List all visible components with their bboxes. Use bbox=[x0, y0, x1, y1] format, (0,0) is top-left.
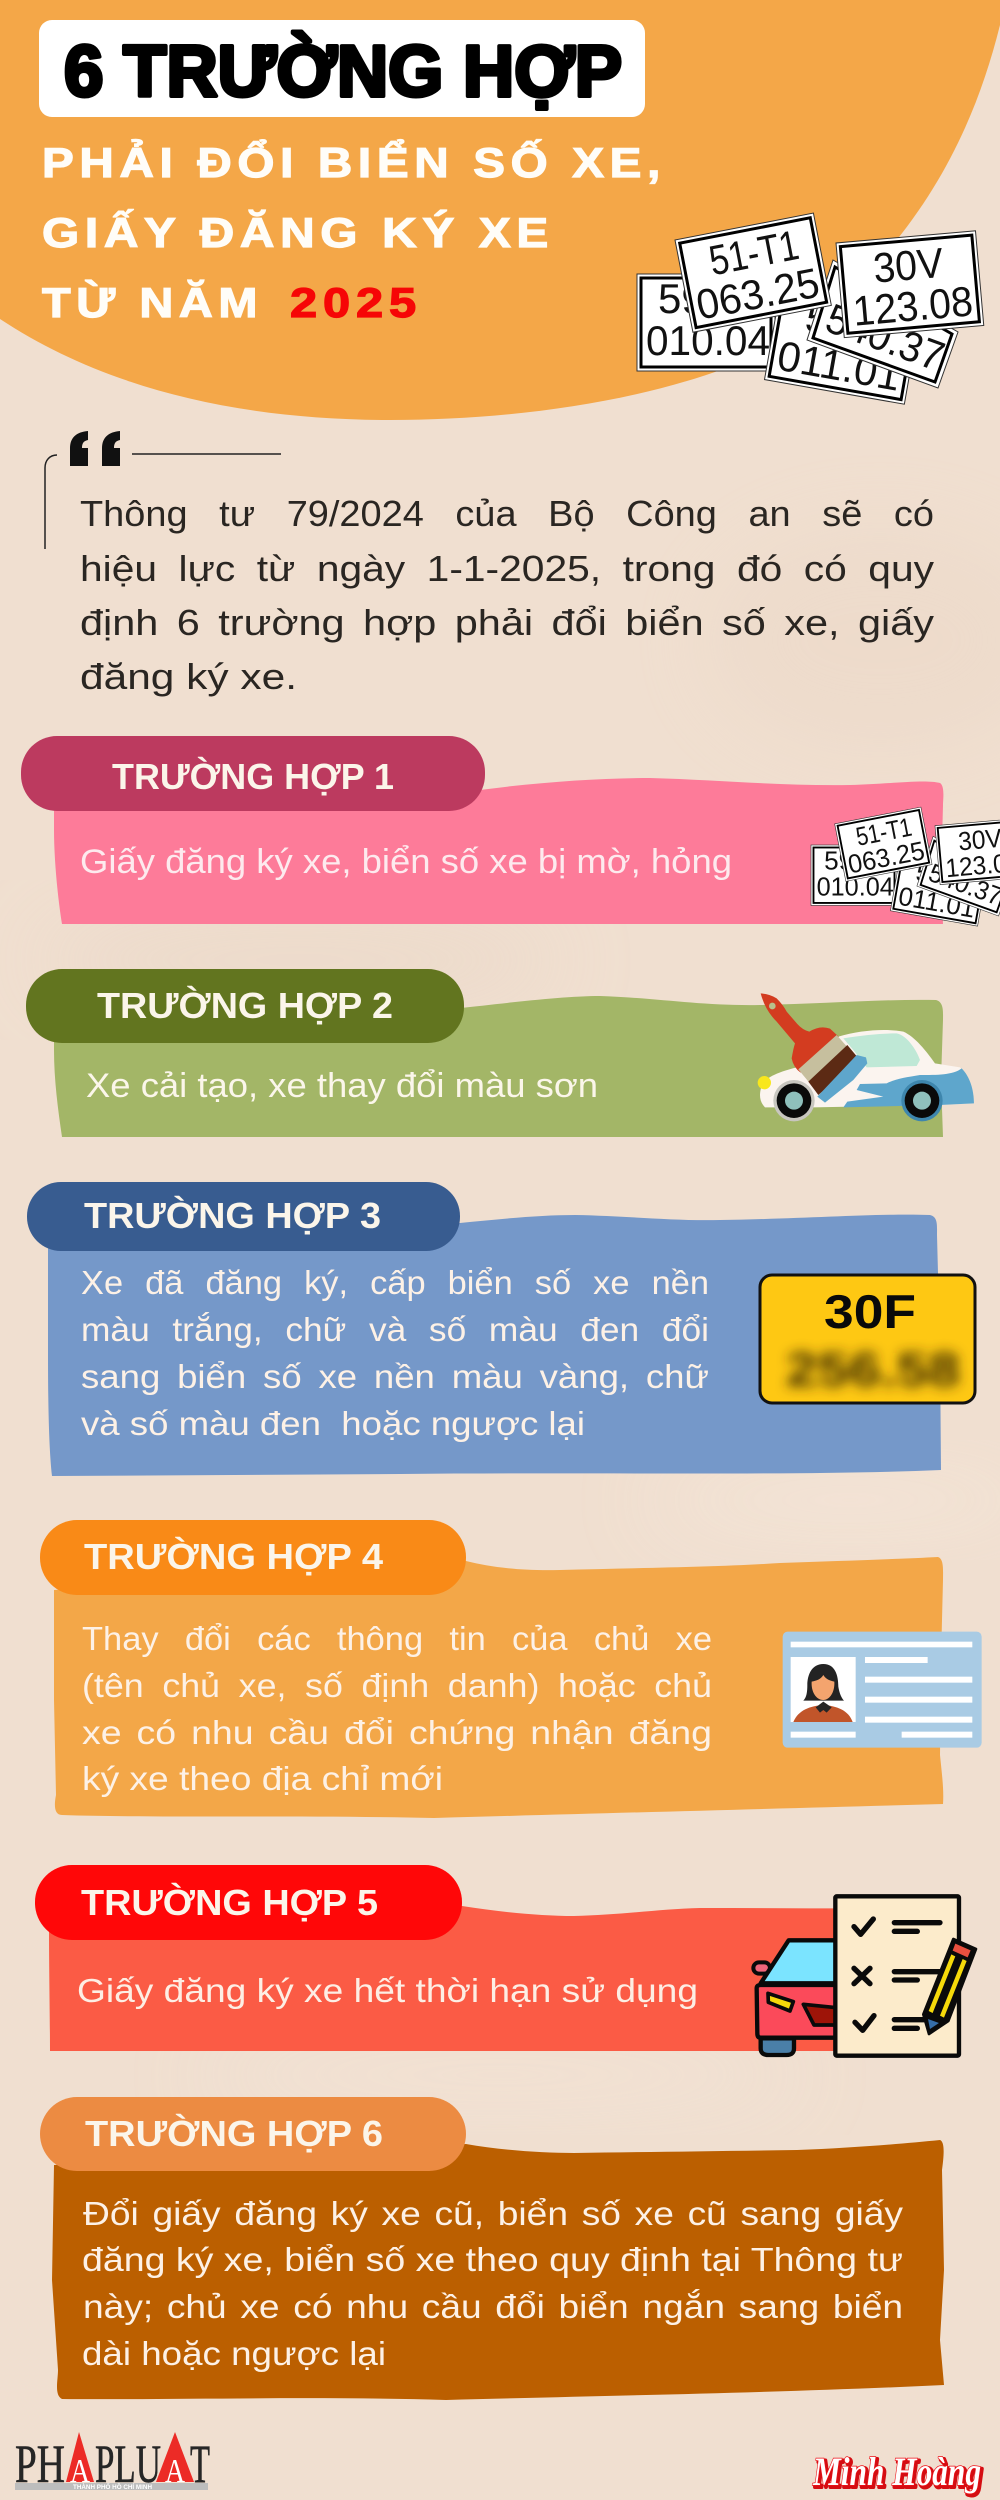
panel: case 2: Xe cải tạo, xe thay đổi màu sơn bbox=[86, 1067, 598, 1105]
panel: case 4: Thay đổi các thông tin của chủ xe bbox=[82, 1620, 712, 1657]
icon: small license plates: 063.25 bbox=[845, 835, 927, 879]
icon: license plates pile bbox=[637, 213, 984, 404]
logo: Pháp Luật: PLU bbox=[95, 2434, 161, 2494]
icon: license plates pile: 59 bbox=[658, 275, 705, 322]
icon: car with checklist bbox=[753, 1896, 976, 2056]
icon: small license plates bbox=[811, 807, 1000, 926]
panel: case 4 bbox=[40, 1520, 943, 1818]
panel: case 6 bbox=[40, 2097, 944, 2400]
panel: case 3: sang biển số xe nền màu vàng, chữ bbox=[81, 1358, 709, 1395]
panel: case 3: TRƯỜNG HỢP 3 bbox=[84, 1194, 381, 1236]
icon: car being painted bbox=[758, 993, 974, 1121]
intro text: định 6 trường hợp phải đổi biển số xe, giấy bbox=[80, 602, 934, 643]
icon: license plates pile: 540.37 bbox=[820, 294, 951, 380]
panel: case 1 bbox=[21, 736, 943, 924]
icon: license plates pile: 30V bbox=[871, 239, 945, 292]
panel: case 6: TRƯỜNG HỢP 6 bbox=[85, 2112, 383, 2154]
panel: case 6: đăng ký xe, biển số xe theo quy định tại Thông tư bbox=[82, 2241, 903, 2278]
intro text: Thông tư 79/2024 của Bộ Công an sẽ có bbox=[80, 493, 934, 534]
intro text bbox=[80, 493, 934, 697]
subtitle bbox=[42, 137, 666, 326]
panel: case 5: Giấy đăng ký xe hết thời hạn sử dụng bbox=[77, 1972, 698, 2009]
logo: Pháp Luật: THÀNH PHỐ HỒ CHÍ MINH bbox=[73, 2481, 152, 2491]
panel: case 3: và số màu đen hoặc ngược lại bbox=[81, 1405, 585, 1442]
icon: yellow license plate: 30F bbox=[824, 1285, 916, 1338]
icon: license plates pile: 123.08 bbox=[851, 277, 975, 335]
icon: small license plates: 59 bbox=[914, 857, 948, 891]
intro text: đăng ký xe. bbox=[80, 656, 297, 697]
panel: case 4: ký xe theo địa chỉ mới bbox=[82, 1760, 443, 1797]
panel: case 4: TRƯỜNG HỢP 4 bbox=[84, 1535, 383, 1577]
panel: case 5 bbox=[35, 1865, 941, 2051]
logo: Pháp Luật bbox=[15, 2432, 210, 2494]
quote marks and bracket bbox=[45, 431, 281, 549]
subtitle: 2025 bbox=[290, 279, 422, 326]
header orange circle bbox=[0, 0, 1000, 420]
icon: ID card bbox=[783, 1632, 982, 1748]
panel: case 2 bbox=[26, 969, 943, 1137]
subtitle: PHẢI ĐỔI BIỂN SỐ XE, bbox=[42, 137, 666, 186]
title box: 6 TRƯỜNG HỢP bbox=[64, 31, 622, 112]
logo: Pháp Luật: A bbox=[165, 2453, 185, 2490]
panel: case 2: TRƯỜNG HỢP 2 bbox=[97, 984, 393, 1026]
panel: case 6: này; chủ xe có nhu cầu đổi biển ngắn sang biển bbox=[83, 2288, 903, 2325]
icon: yellow license plate bbox=[760, 1275, 975, 1403]
intro text: hiệu lực từ ngày 1-1-2025, trong đó có quy bbox=[80, 548, 934, 589]
panel: case 6: Đổi giấy đăng ký xe cũ, biển số xe cũ sang giấy bbox=[83, 2195, 904, 2232]
panel: case 1: TRƯỜNG HỢP 1 bbox=[112, 755, 394, 797]
icon: small license plates: 51-T1 bbox=[853, 812, 914, 852]
icon: yellow license plate: 256.58 bbox=[786, 1344, 960, 1397]
logo: Pháp Luật: T bbox=[190, 2434, 210, 2494]
icon: small license plates: 59 bbox=[824, 845, 853, 875]
icon: license plates pile: 011.01 bbox=[774, 332, 904, 400]
panel: case 4: (tên chủ xe, số định danh) hoặc chủ bbox=[82, 1667, 712, 1704]
icon: license plates pile: 59 bbox=[802, 293, 856, 348]
panel: case 3 bbox=[27, 1182, 941, 1476]
icon: license plates pile: 063.25 bbox=[692, 259, 823, 329]
icon: license plates pile: 010.04 bbox=[646, 317, 770, 364]
subtitle: TỪ NĂM bbox=[42, 278, 263, 326]
panel: case 1: Giấy đăng ký xe, biển số xe bị mờ, hỏng bbox=[80, 843, 732, 881]
panel: case 4: xe có nhu cầu đổi chứng nhận đăng bbox=[82, 1714, 712, 1751]
panel: case 5: TRƯỜNG HỢP 5 bbox=[81, 1881, 378, 1923]
subtitle: GIẤY ĐĂNG KÝ XE bbox=[42, 209, 554, 256]
panel: case 3: Xe đã đăng ký, cấp biển số xe nền bbox=[81, 1264, 709, 1301]
panel: case 6: dài hoặc ngược lại bbox=[82, 2335, 386, 2372]
icon: license plates pile: 51-T1 bbox=[705, 221, 803, 284]
panel: case 3: màu trắng, chữ và số màu đen đổi bbox=[81, 1311, 709, 1348]
icon: small license plates: 010.04 bbox=[817, 871, 894, 901]
icon: small license plates: 011.01 bbox=[896, 881, 978, 924]
logo: Pháp Luật: A bbox=[70, 2453, 90, 2490]
logo: Pháp Luật: PH bbox=[15, 2434, 65, 2494]
